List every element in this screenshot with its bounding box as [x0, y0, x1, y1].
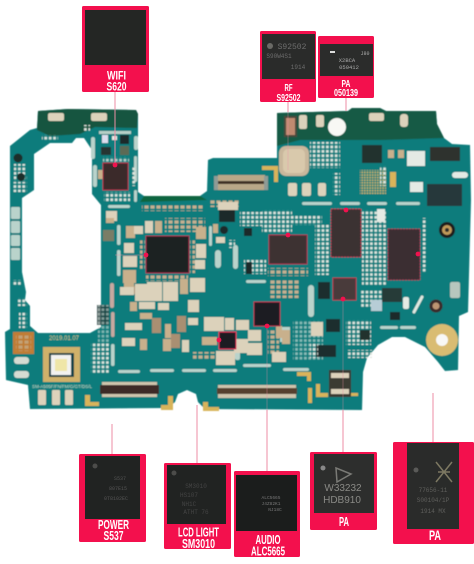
card: PA 050139: 050412	[339, 64, 359, 71]
dark green top right lobe	[277, 108, 444, 146]
left bottom connector	[100, 382, 159, 397]
date code and QR block: 2019.01.07	[49, 336, 80, 342]
card: PA 050139: J80	[360, 51, 370, 57]
card: PA W33232: HDB910	[323, 495, 361, 506]
card: POWER S537: 0T8102EC	[104, 496, 128, 502]
card: RF S92502: S92502	[278, 43, 307, 52]
chip: LCD light on board	[219, 332, 236, 349]
label: PA 050139	[334, 78, 358, 99]
label: RF S92502: S92502	[276, 92, 301, 104]
card: WIFI S620	[82, 6, 149, 94]
card: RF S92502: 1914	[291, 64, 306, 71]
chip: PA 050139 on board	[331, 209, 361, 257]
card: PA W33232: W33232	[324, 483, 362, 494]
label: AUDIO ALC5665: AUDIO	[256, 533, 281, 547]
card: PA 050139: X2BCA	[339, 57, 356, 64]
label: POWER S537: POWER	[98, 518, 129, 532]
card: LCD LIGHT SM3010: ATHT 76	[183, 509, 209, 516]
card: PA 77656: 1914 MX	[420, 508, 446, 515]
main center passive cluster	[91, 200, 240, 374]
card: LCD LIGHT SM3010: NH1C	[182, 501, 197, 508]
card: RF S92502	[260, 31, 316, 104]
card: AUDIO ALC5665: ALC5665	[262, 495, 281, 501]
chip: PA large on board	[388, 229, 420, 280]
card: RF S92502: S90W4S1	[266, 53, 292, 60]
circuit board	[5, 108, 471, 411]
card: AUDIO ALC5665: NJ18C	[268, 507, 282, 513]
label: POWER S537	[98, 518, 129, 543]
label: LCD LIGHT SM3010: SM3010	[182, 537, 215, 551]
label: LCD LIGHT SM3010: LCD LIGHT	[178, 526, 219, 540]
flash LED module	[43, 347, 80, 382]
label: POWER S537: S537	[104, 529, 124, 543]
label: WIFI S620	[106, 68, 127, 94]
label: RF S92502: RF	[284, 82, 293, 94]
chip location dots	[113, 163, 420, 342]
label: AUDIO ALC5665: ALC5665	[251, 544, 285, 558]
chip: PA small on board	[333, 278, 356, 300]
card: POWER S537: S537	[114, 476, 126, 482]
mounting holes and top pads	[42, 113, 408, 144]
label: PA: PA	[339, 515, 349, 529]
label: WIFI S620: WIFI	[107, 68, 126, 82]
card: PA 77656	[393, 442, 474, 544]
darker board shade	[140, 196, 207, 202]
label: RF S92502	[276, 82, 301, 104]
label: PA: PA	[429, 527, 441, 543]
top centre connector	[214, 175, 268, 190]
date code and QR block	[13, 332, 80, 378]
chip: audio on board	[254, 302, 280, 326]
card: LCD LIGHT SM3010	[164, 463, 231, 551]
card: PA W33232	[310, 452, 377, 530]
label: LCD LIGHT SM3010	[178, 526, 219, 551]
card: POWER S537	[79, 454, 146, 543]
card: POWER S537: 807E15	[109, 486, 127, 492]
wifi area components	[91, 136, 138, 208]
dark green top left lobe	[37, 109, 138, 136]
coax connectors and gold pad	[426, 222, 458, 356]
card: PA 050139	[318, 36, 374, 99]
right side components	[233, 142, 468, 403]
left strip components	[11, 154, 27, 328]
card: AUDIO ALC5665: J4Z82K1	[262, 501, 281, 507]
small silkscreen text and pads: SM-A505F/FN/FM/G/GT/DS/L	[32, 384, 92, 389]
label: PA 050139: 050139	[334, 87, 358, 99]
chip: wifi on board	[103, 163, 128, 190]
card: LCD LIGHT SM3010: HS107	[180, 492, 198, 499]
chip: RF on board	[269, 235, 307, 264]
connector lines	[112, 92, 433, 471]
card: LCD LIGHT SM3010: SM3010	[185, 483, 207, 490]
label: AUDIO ALC5665	[251, 533, 285, 558]
board outline	[5, 108, 471, 410]
card: PA 77656: 77656-11	[419, 487, 448, 494]
card: PA 77656: S00104/1P	[417, 497, 450, 504]
small silkscreen text and pads	[32, 384, 219, 411]
label: WIFI S620: S620	[106, 80, 127, 94]
label: PA 050139: PA	[342, 78, 351, 90]
chip: main processor	[146, 236, 189, 273]
card: AUDIO ALC5665	[234, 471, 300, 558]
centre bottom connector	[217, 385, 297, 398]
